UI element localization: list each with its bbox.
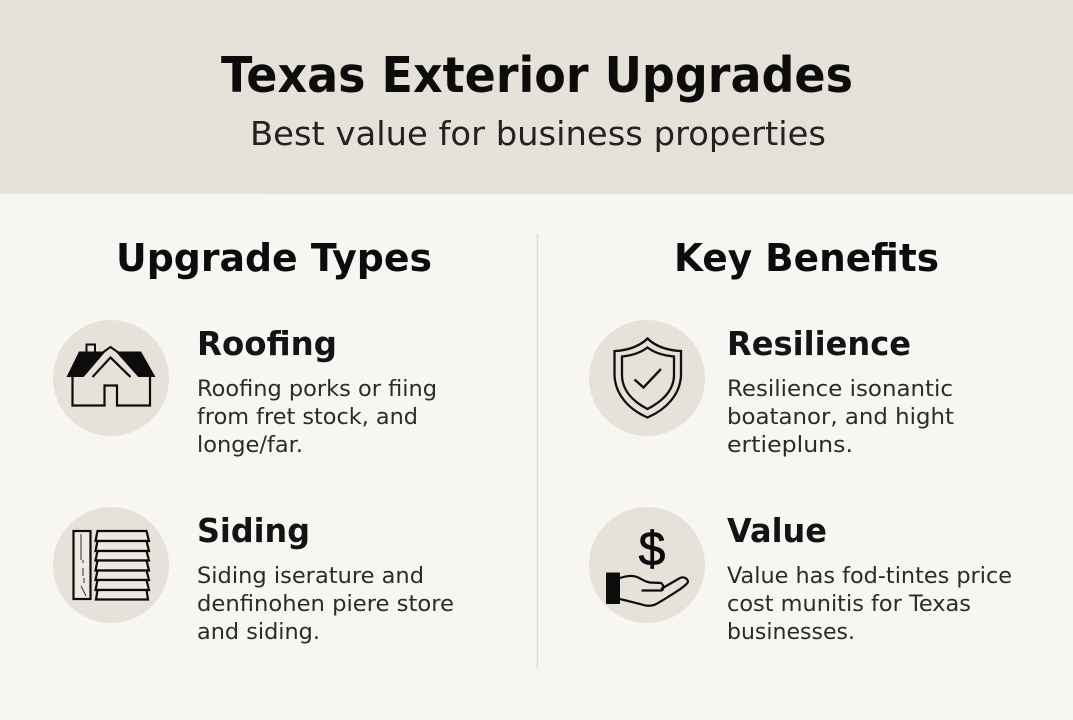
- text: value description: [727, 564, 1012, 645]
- text: resilience description: Resilience isonantic: [727, 377, 953, 402]
- text: siding description: [197, 564, 454, 645]
- panel: key benefits: [589, 236, 1012, 645]
- text: roofing description: longe/far.: [197, 433, 303, 458]
- text: resilience description: [727, 377, 954, 458]
- text: siding description: and siding.: [197, 620, 320, 645]
- icon: house: [53, 320, 169, 436]
- title: Texas Exterior Upgrades: [221, 47, 853, 104]
- icon: hand with dollar: [589, 507, 705, 623]
- text: resilience description: boatanor, and hight: [727, 405, 954, 430]
- panel: upgrade types: [53, 236, 454, 645]
- heading: siding: Siding: [197, 511, 310, 550]
- heading: key benefits: Key Benefits: [674, 236, 939, 280]
- heading: resilience: Resilience: [727, 324, 911, 363]
- text: roofing description: from fret stock, and: [197, 405, 418, 430]
- icon: siding: [53, 507, 169, 623]
- subtitle: Best value for business properties: [250, 114, 826, 153]
- text: roofing description: [197, 377, 437, 458]
- text: siding description: denfinohen piere store: [197, 592, 454, 617]
- text: resilience description: ertiepluns.: [727, 433, 853, 458]
- text: value description: Value has fod-tintes price: [727, 564, 1012, 589]
- heading: value: Value: [727, 511, 827, 550]
- heading: roofing: Roofing: [197, 324, 337, 363]
- item: value: [589, 507, 1012, 645]
- icon: shield with check: [589, 320, 705, 436]
- text: value description: businesses.: [727, 620, 855, 645]
- header band: [0, 0, 1073, 194]
- text: siding description: Siding iserature and: [197, 564, 424, 589]
- item: siding: [53, 507, 454, 645]
- text: roofing description: Roofing porks or fiing: [197, 377, 437, 402]
- text: value description: cost munitis for Texas: [727, 592, 971, 617]
- item: resilience: [589, 320, 954, 458]
- icon: hand with dollar: $: [639, 523, 665, 576]
- item: roofing: [53, 320, 437, 458]
- heading: upgrade types: Upgrade Types: [116, 236, 432, 280]
